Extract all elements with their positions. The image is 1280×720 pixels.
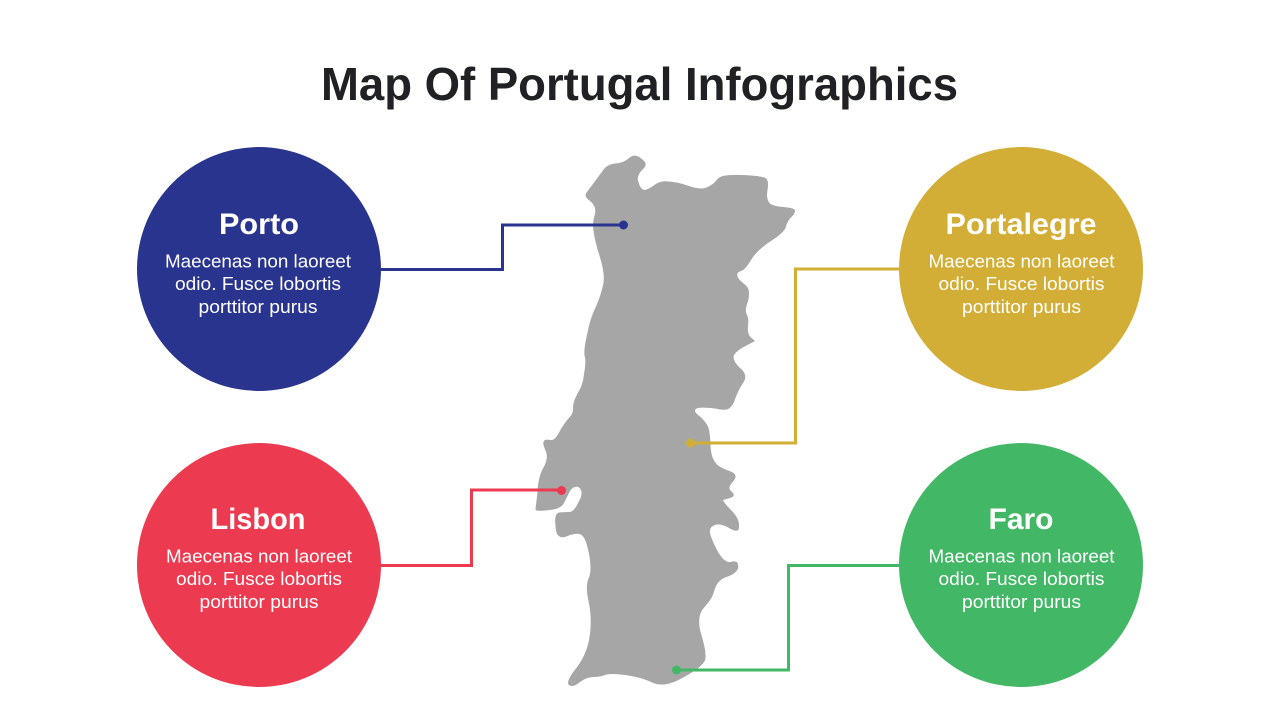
text: Lisbon description [166,546,352,612]
text: Portalegre description [928,252,1114,317]
text: Porto description: odio. Fusce lobortis [175,274,341,294]
text: Faro description: porttitor purus [962,592,1081,612]
panel: Porto: Porto [219,208,299,241]
panel: Lisbon: Lisbon [210,503,306,536]
panel: Porto [137,147,381,391]
text: Faro description [928,546,1114,612]
text: Porto description: porttitor purus [198,297,318,317]
connector: Lisbon [381,486,566,566]
panel: Faro [899,443,1143,687]
panel: Portalegre: Portalegre [946,208,1096,241]
title: Map Of Portugal Infographics [321,58,958,110]
text: Lisbon description: odio. Fusce lobortis [176,569,342,589]
text: Faro description: Maecenas non laoreet [928,546,1114,566]
panel: Portalegre [899,147,1143,391]
text: Porto description [165,252,351,317]
panel: Faro: Faro [988,503,1054,536]
map of Portugal [535,156,795,686]
text: Porto description: Maecenas non laoreet [165,252,351,272]
text: Portalegre description: Maecenas non laoreet [928,252,1114,272]
text: Portalegre description: porttitor purus [962,297,1081,317]
text: Lisbon description: Maecenas non laoreet [166,546,352,566]
text: Lisbon description: porttitor purus [200,592,318,612]
connector: Portalegre [686,269,899,448]
text: Faro description: odio. Fusce lobortis [938,569,1104,589]
panel: Lisbon [137,443,381,687]
text: Portalegre description: odio. Fusce lobortis [938,274,1104,294]
connector: Porto [381,220,628,270]
connector: Faro [672,566,899,674]
